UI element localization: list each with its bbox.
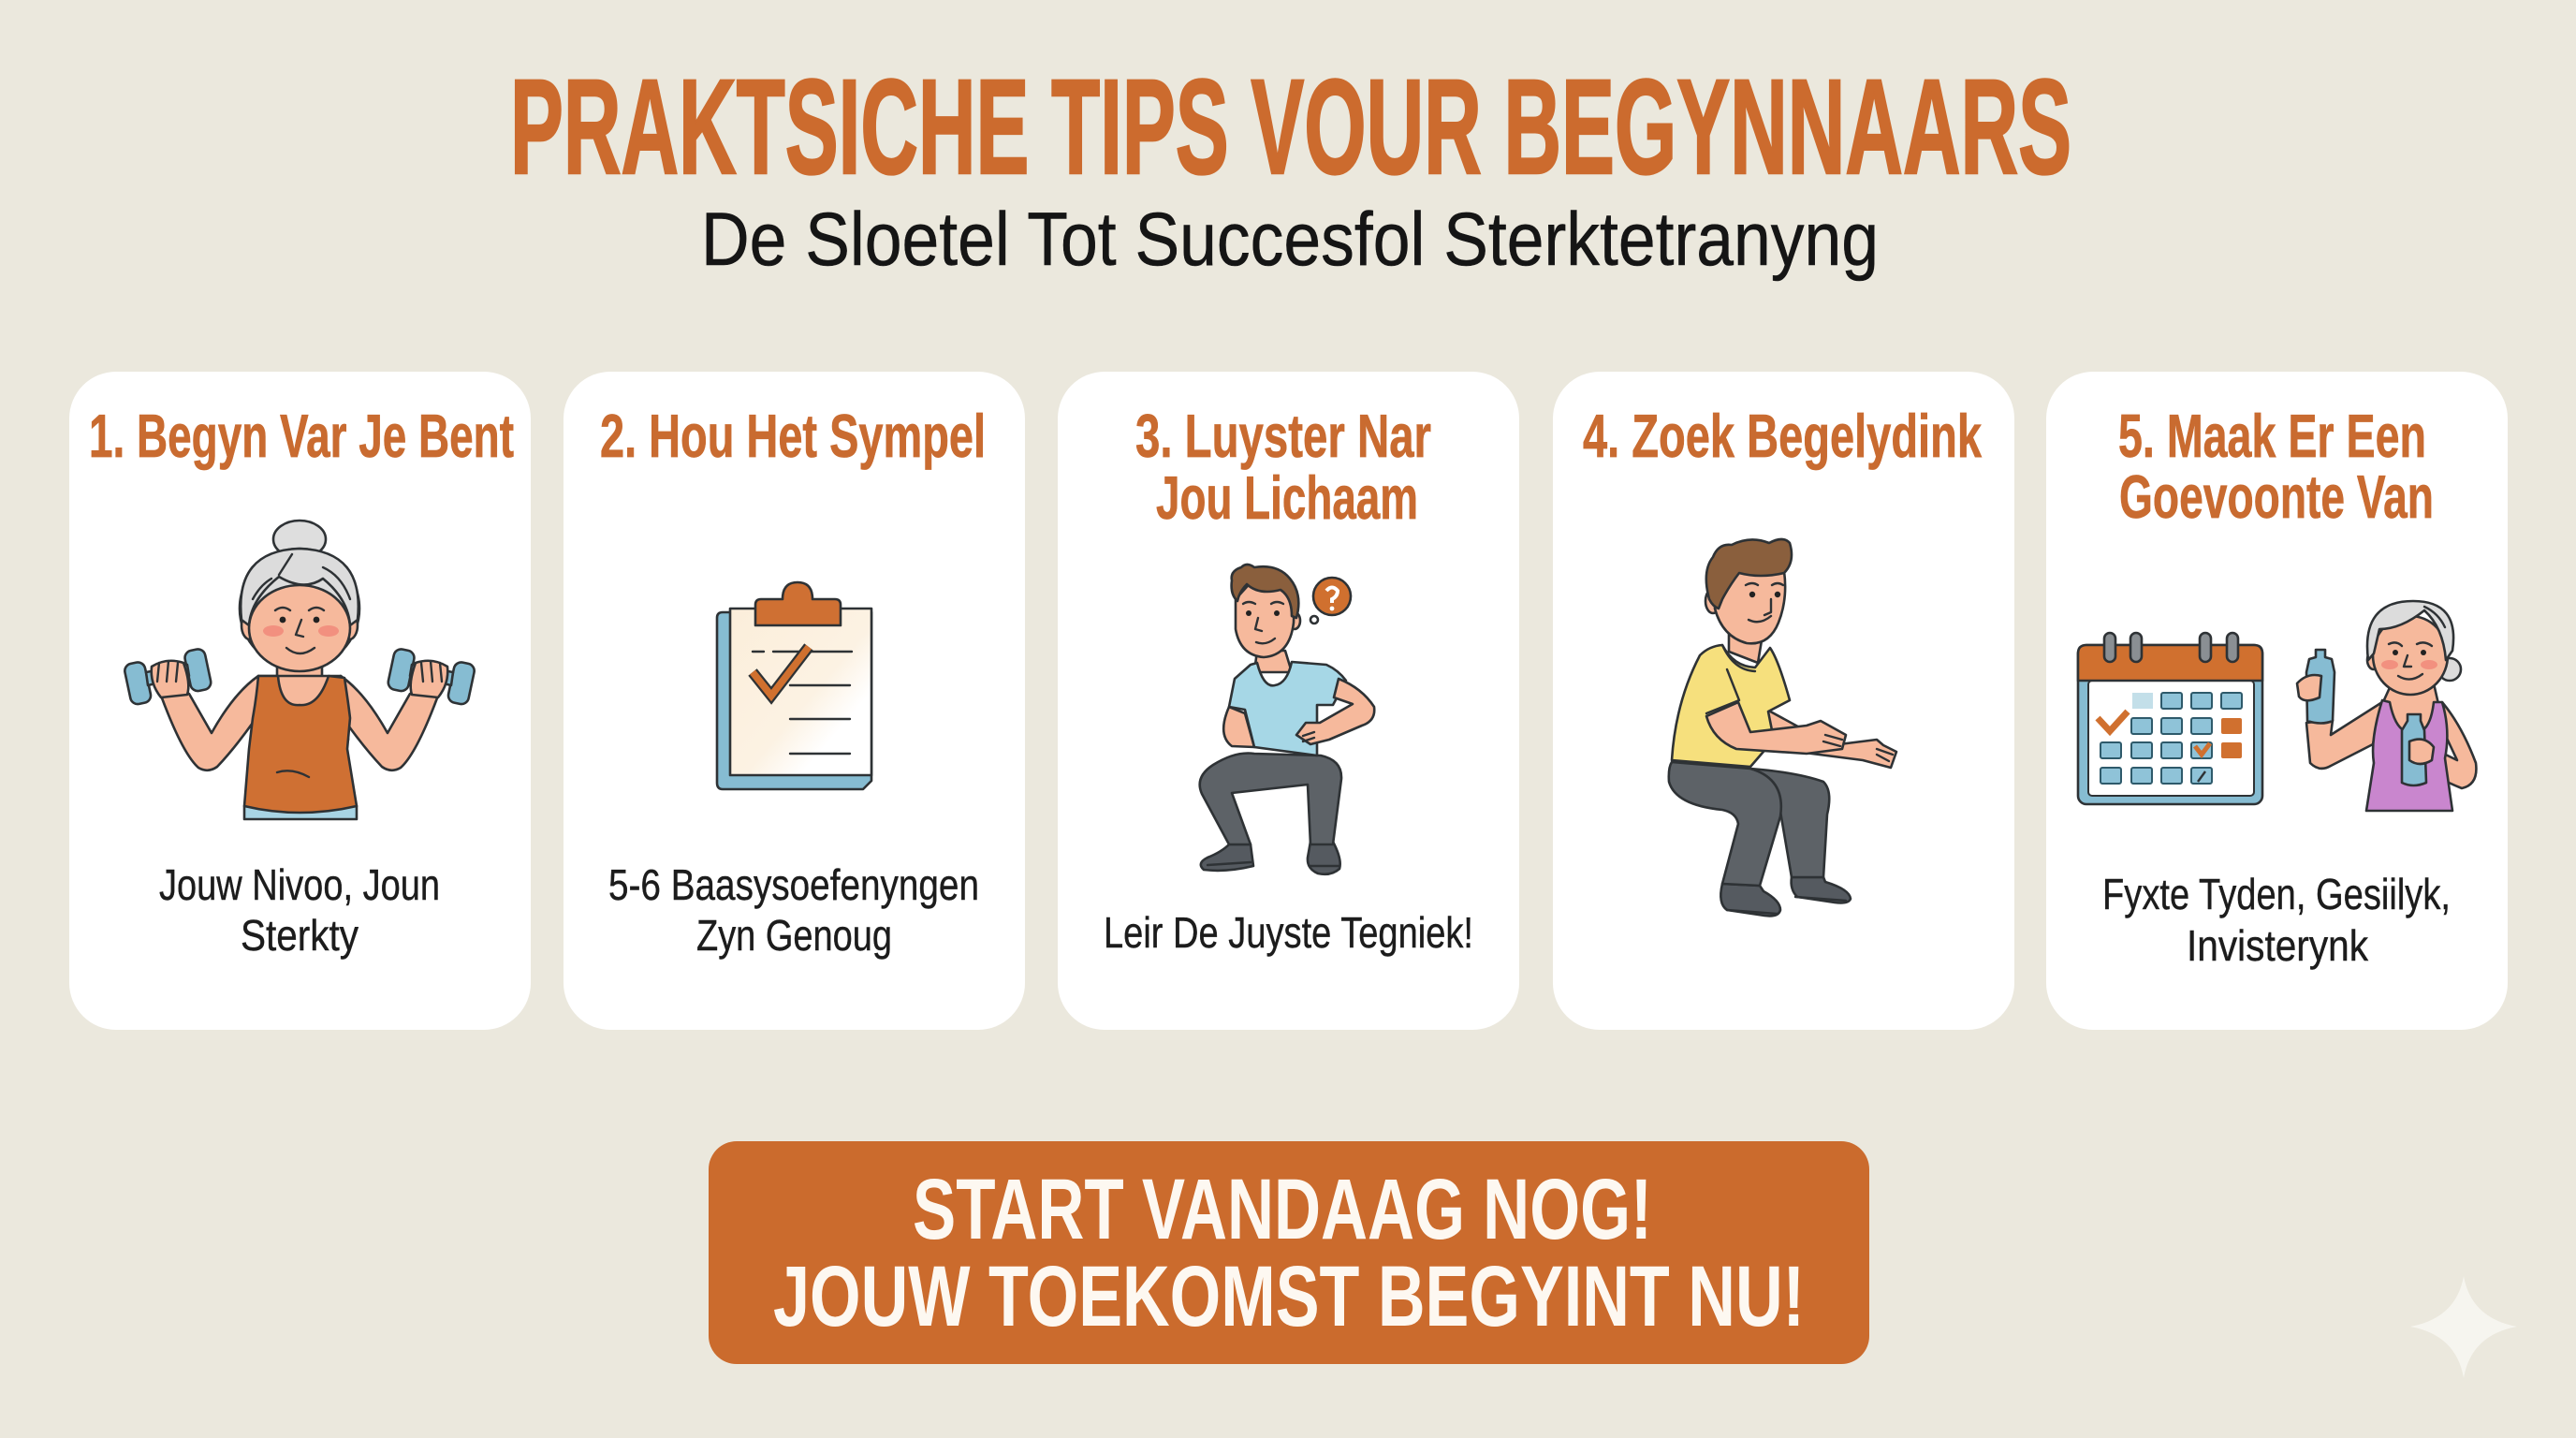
icon: clipboard with checkmark xyxy=(717,582,871,789)
illustration: man squatting with question bubble xyxy=(1200,565,1374,874)
subtitle: De Sloetel Tot Succesfol Sterktetranyng xyxy=(701,198,1879,282)
panel: tip 1: Sterkty xyxy=(241,911,359,960)
panel: tip 5: Invisterynk xyxy=(2187,921,2369,970)
illustration: man doing a squat xyxy=(1669,539,1896,916)
panel: tip 2 xyxy=(564,372,1025,1030)
heading: tip 1: 1. Begyn Var Je Bent xyxy=(89,402,514,470)
text: tip 2: 5-6 Baasysoefenyngen xyxy=(608,860,979,909)
panel: tip 5 xyxy=(2046,372,2508,1030)
panel: tip 3 xyxy=(1058,372,1519,1030)
heading: tip 4: 4. Zoek Begelydink xyxy=(1583,402,1983,470)
text: tip 5: Fyxte Tyden, Gesiilyk, xyxy=(2102,870,2451,918)
call to action banner: START VANDAAG NOG! xyxy=(913,1162,1652,1257)
call to action banner xyxy=(709,1141,1869,1364)
text: tip 1: Jouw Nivoo, Joun xyxy=(159,860,440,909)
call to action banner: JOUW TOEKOMST BEGYINT NU! xyxy=(773,1249,1805,1344)
panel: tip 1 xyxy=(69,372,531,1030)
icon: sparkle xyxy=(2410,1276,2517,1378)
text: tip 3: Leir De Juyste Tegniek! xyxy=(1104,908,1473,957)
illustration: senior woman with water bottles xyxy=(2297,601,2476,811)
panel: tip 4 xyxy=(1553,372,2014,1030)
illustration: senior woman with dumbbells xyxy=(124,521,476,819)
panel: tip 5: Goevoonte Van xyxy=(2119,462,2434,531)
panel: tip 3: Jou Lichaam xyxy=(1156,463,1418,532)
heading: tip 5: 5. Maak Er Een xyxy=(2118,402,2426,470)
icon: calendar xyxy=(2078,633,2262,804)
panel: tip 2: Zyn Genoug xyxy=(696,911,892,960)
heading: tip 3: 3. Luyster Nar xyxy=(1135,402,1431,470)
heading: tip 2: 2. Hou Het Sympel xyxy=(600,402,986,470)
